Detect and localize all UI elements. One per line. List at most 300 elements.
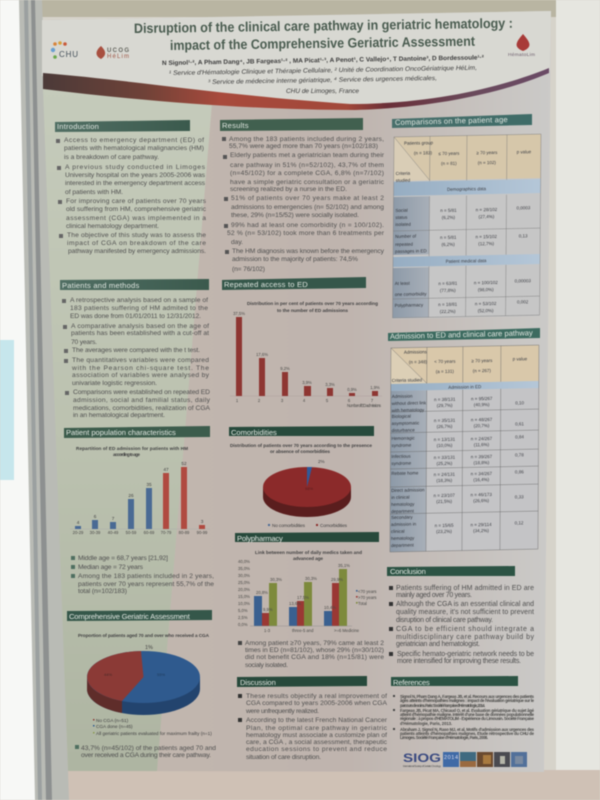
introduction text: is a breakdown of care pathway. [64, 154, 159, 161]
results text: Among the 183 patients included during 2 years, [229, 136, 384, 143]
introduction text: pathway manifested by emergency admissions. [68, 248, 206, 255]
introduction text: of patients with HM. [65, 189, 123, 196]
pie chart: comorbidities: No comorbidities [272, 523, 306, 528]
table: comparisons on patient age [393, 134, 541, 319]
heading: comparisons on the patient age [392, 114, 532, 128]
title: Disruption of the clinical care pathway in geriatric hematology : [134, 16, 513, 36]
bar chart: ED admission by age: according to age [113, 452, 140, 457]
results text: 51% of patients over 70 years make at least 2 [231, 195, 384, 202]
bar chart: ED admission by age: 80-89 [179, 530, 190, 535]
table: comparisons on patient age: p value [517, 149, 532, 155]
authors and affiliations [162, 54, 484, 95]
grouped bar chart: daily medics by age: 1-3 [264, 628, 271, 633]
heading: references: References [393, 678, 430, 687]
conclusion text: disruption of clinical care pathway. [396, 617, 493, 624]
table: admission to ED: n = 15/65 [435, 523, 454, 528]
logo: SIOG 2014: International Society of Geriatric Oncology [403, 764, 442, 768]
table: admission to ED: Direct admission [391, 487, 425, 493]
bar chart: ED admission by age [70, 446, 210, 535]
table: comparisons on patient age: status [395, 215, 408, 220]
table: admission to ED: (18,8%) [473, 460, 490, 465]
table: admission to ED: 0,61 [515, 421, 524, 427]
heading: conclusion: Conclusion [390, 567, 426, 576]
table: admission to ED: disturbance [392, 428, 415, 433]
table: comparisons on patient age: (n = 102) [478, 160, 496, 165]
grouped bar chart: daily medics by age [238, 550, 377, 633]
heading: comprehensive geriatric assessment: Comprehensive Geriatric Assessment [69, 612, 191, 621]
CGA text [75, 745, 216, 759]
logo: UCOG HeLim [96, 46, 129, 60]
table: admission to ED: Rebate home [391, 470, 419, 476]
bar chart: ED admission by age: 7 [112, 516, 115, 521]
table: admission to ED: (11,6%) [474, 442, 490, 447]
grouped bar chart: daily medics by age: 17,5% [297, 595, 309, 600]
pie chart: CGA proportion: All geriatric patients evaluated for maximum frailty (n=1) [96, 731, 212, 736]
population text: patients over 70 years represent 55,7% of the [78, 581, 214, 588]
table: comparisons on patient age: (6,2%) [442, 215, 455, 220]
table: comparisons on patient age: n = 100/102 [474, 280, 498, 285]
introduction text: A previous study conducted in Limoges [65, 164, 206, 171]
results text: (n=45/102) for a complete CGA, 6,8% (n=7/102) [230, 170, 384, 177]
panel: comorbidities [229, 426, 374, 528]
grouped bar chart: daily medics by age: 30,3% [305, 576, 317, 581]
table: comparisons on patient age: 0,002 [517, 299, 529, 305]
table: admission to ED: (29,7%) [437, 403, 453, 408]
logo: CHU Limoges [51, 41, 78, 59]
table: admission to ED: (16,4%) [473, 477, 490, 482]
table: admission to ED: (10,0%) [437, 443, 453, 448]
results text: day. [231, 239, 243, 246]
grouped bar chart: daily medics by age: 35,0% [238, 566, 250, 571]
grouped bar chart: daily medics by age: Total [358, 601, 367, 606]
table: comparisons on patient age: one comorbidity [395, 291, 427, 297]
heading: patient population characteristics: Patient population characteristics [66, 428, 176, 437]
bar chart: ED admission by age: 40-49 [108, 530, 119, 535]
table: admission to ED: with hematology [392, 407, 425, 413]
bar chart: ED admissions distribution: 1,9% [370, 385, 380, 390]
table: admission to ED: (34,2%) [473, 528, 489, 533]
pie chart: comorbidities: 98% [305, 486, 313, 491]
population text: total (n=102/183) [78, 588, 127, 595]
discussion text: Plan, the optimal care pathway in geriatric [246, 725, 388, 732]
bar chart: ED admission by age: 52 [181, 461, 187, 466]
population text: Among the 183 patients included in 2 years, [78, 573, 214, 580]
discussion text [238, 693, 388, 761]
table: admission to ED: 0,12 [515, 520, 524, 526]
results text: admissions to emergencies (n= 52/102) and among [231, 204, 384, 211]
grouped bar chart: daily medics by age: >=6 Medicine [334, 628, 360, 633]
grouped bar chart: daily medics by age: 13,6% [289, 601, 301, 606]
methods text: A retrospective analysis based on a sample of [70, 297, 208, 304]
heading: comorbidities [229, 426, 374, 437]
table: admission to ED: < 70 years [434, 359, 456, 364]
table: admission to ED: Secondary [391, 515, 413, 520]
bar chart: ED admission by age: 50-59 [126, 530, 137, 535]
conclusion text: Specific hemato-geriatric network needs to be [397, 651, 534, 658]
panel: conclusion [387, 566, 534, 665]
introduction text: University hospital on the years 2005-2006 was [65, 172, 206, 179]
panel: patients and methods [60, 279, 211, 419]
grouped bar chart: daily medics by age: 9,9% [263, 607, 273, 612]
table: admission to ED: n = 34/267 [471, 471, 493, 476]
table: admission to ED: n = 38/131 [434, 397, 456, 402]
table: admission to ED: (n = 348) [409, 359, 428, 365]
methods text: medications, comorbidities, realization of CGA [73, 405, 211, 412]
methods text: 70 years. [71, 339, 97, 346]
grouped bar chart: daily medics by age: advanced age [293, 556, 323, 561]
table: comparisons on patient age: passages in ED [395, 248, 427, 254]
table: admission to ED: n = 46/173 [471, 492, 492, 497]
authors and affiliations: ¹ Service d'Hématologie Clinique et Thérapie Cellulaire, ² Unité de Coordination OncoGériatrique HéLim, [169, 65, 477, 77]
results text: have a simple geriatric consultation or a geriatric [230, 179, 385, 186]
table: comparisons on patient age: 0,00003 [515, 278, 531, 284]
bar chart: ED admissions distribution: to the number of ED admissions [277, 308, 348, 313]
table: admission to ED: 0,10 [515, 400, 525, 406]
panel: comprehensive geriatric assessment [67, 610, 216, 759]
table: comparisons on patient age: (n = 81) [441, 161, 457, 166]
panel: polypharmacy [235, 532, 384, 669]
results text: these, 29% (n=15/52) were socially isolated. [231, 212, 359, 219]
polypharmacy text: times in ED (n=81/102), whose 29% (n=30/102) [245, 647, 384, 654]
table: comparisons on patient age: n = 63/81 [438, 281, 458, 286]
heading: polypharmacy [235, 532, 379, 543]
bar chart: ED admission by age: 3 [201, 519, 204, 524]
grouped bar chart: daily medics by age: 30,0% [238, 573, 250, 578]
table: admission to ED: (26,6%) [473, 498, 490, 503]
grouped bar chart: daily medics by age: 0,0% [238, 622, 248, 627]
table: admission to ED: 0,78 [515, 452, 524, 458]
references list: Limoges. Société Française d'Hématologie, Paris, 2008. [400, 735, 488, 740]
table: admission to ED: (18,3%) [436, 478, 453, 483]
table: comparisons on patient age: 0,13 [519, 233, 528, 238]
pie chart: CGA proportion: No CGA (n=51) [96, 718, 129, 723]
table: admission to ED: ≥ 70 years [471, 358, 493, 363]
table: comparisons on patient age: (27,4%) [478, 214, 495, 219]
bar chart: ED admissions distribution: Distribution in per cent of patients over 70 years according [247, 301, 378, 306]
table: comparisons on patient age: Patient medical data [446, 258, 487, 264]
panel: admission to ED and clinical care pathway [388, 328, 540, 552]
table: comparisons on patient age: n = 5/81 [440, 208, 457, 213]
table: admission to ED: without direct link [392, 400, 427, 406]
bar chart: ED admissions distribution: 37,5% [233, 311, 245, 316]
grouped bar chart: daily medics by age: 20,0% [238, 587, 250, 592]
grouped bar chart: daily medics by age: 2,5% [238, 615, 248, 620]
decorative swoosh banner [43, 68, 549, 110]
bar chart: ED admissions distribution [230, 301, 382, 408]
table: comparisons on patient age: n = 18/81 [438, 302, 458, 307]
introduction text: impact of CGA on breakdown of the care [67, 240, 206, 247]
heading: admission to ED and clinical care pathway: Admission to ED and clinical care pathway [390, 328, 533, 341]
logo: HematoLim [508, 34, 535, 58]
references list: parcours de soins. Paris: Société Française d'Hématologie, 2014. [400, 703, 485, 708]
bar chart: ED admission by age: 26 [128, 493, 134, 498]
table: comparisons on patient age: ≤ 70 years [438, 151, 460, 156]
CGA text: 43,7% (n=45/102) of the patients aged 70 and [81, 745, 216, 752]
grouped bar chart: daily medics by age: 20,8% [256, 590, 268, 595]
introduction text: clinical hematology department. [66, 223, 159, 230]
panel: discussion [237, 676, 388, 761]
methods text: Comparisons were established on repeated ED [73, 389, 210, 396]
authors and affiliations: ³ Service de médecine interne gériatrique, ⁴ Service des urgences médicales, [208, 75, 437, 86]
heading: patients and methods [60, 279, 209, 290]
methods text: A comparative analysis based on the age of [71, 323, 209, 330]
table: admission to ED: Admission in ED [448, 384, 482, 390]
logo: SIOG 2014 [403, 751, 527, 768]
table: admission to ED: (n = 267) [473, 368, 491, 373]
bar chart: ED admissions distribution: 17,6% [256, 352, 268, 357]
table: admission to ED: Biological [392, 414, 411, 419]
logo: HematoLim: HématoLim [508, 52, 535, 58]
bar chart: ED admissions distribution: 6 [348, 398, 351, 403]
table: admission to ED: (20,7%) [474, 423, 490, 428]
table: admission to ED: n = 33/131 [434, 455, 456, 460]
table: admission to ED: Infectious [391, 454, 411, 459]
panel: results [220, 118, 385, 273]
discussion text: care, a CGA , a social assessment, therapeutic [246, 739, 388, 746]
table: admission to ED: (25,2%) [436, 461, 453, 466]
grouped bar chart: daily medics by age: 30,3% [270, 577, 282, 582]
introduction text: The objective of this study was to assess the [67, 232, 206, 239]
references list: âgés atteints d'hémopathies malignes : impact de l'évaluation gériatrique sur le [400, 698, 535, 703]
population text: Middle age = 68,7 years [21,92] [78, 555, 168, 562]
bar chart: ED admissions distribution: 0,9% [347, 387, 357, 392]
introduction text: For improving care of patients over 70 years [66, 198, 207, 205]
heading: introduction: Introduction [57, 122, 99, 131]
polypharmacy text: socialy isolated. [245, 662, 288, 669]
methods text: admission, social and familial status, daily [73, 397, 211, 404]
table: admission to ED: p value [513, 356, 528, 362]
logo: UCOG HeLim: UCOG [107, 48, 129, 54]
heading: comprehensive geriatric assessment [67, 610, 212, 621]
table: admission to ED: department [391, 509, 415, 514]
table: admission to ED: Criteria studied [392, 377, 423, 383]
table: comparisons on patient age: (77,8%) [440, 288, 456, 293]
results text: Elderly patients met a geriatrician team during their [230, 152, 385, 159]
table: admission to ED: Admissions [404, 349, 428, 355]
bar chart: ED admissions distribution: 5 [326, 398, 329, 403]
table: comparisons on patient age: n = 28/102 [476, 207, 498, 212]
results text: The HM diagnosis was known before the emergency [232, 248, 385, 255]
population text [71, 555, 214, 595]
pie chart: CGA proportion: Proportion of patients aged 70 and over who received a CGA [78, 633, 210, 638]
table: admission to ED: clinical [391, 529, 405, 534]
table: comparisons on patient age: studied [396, 178, 411, 183]
grouped bar chart: daily medics by age: <70 years [358, 589, 377, 594]
bar chart: ED admissions distribution: Number of ED admissions [347, 403, 381, 408]
results text [222, 136, 385, 273]
table: admission to ED: (26,7%) [437, 424, 453, 429]
table: comparisons on patient age: (22,2%) [440, 309, 456, 314]
heading: polypharmacy: Polypharmacy [237, 534, 283, 543]
bar chart: ED admissions distribution: 3,3% [325, 382, 335, 387]
pie chart: CGA proportion: 1% [145, 645, 153, 651]
bar chart: ED admission by age: 6 [94, 514, 97, 519]
table: admission to ED: syndrome [391, 443, 412, 448]
table: admission to ED: n = 13/131 [434, 437, 456, 442]
results text: screening realized by a nurse in the ED. [230, 186, 347, 193]
pie chart: CGA proportion [78, 633, 212, 736]
conclusion text: Although the CGA is an essential clinical and [396, 601, 534, 608]
methods text [62, 297, 211, 419]
table: comparisons on patient age: repeated [395, 242, 413, 247]
table: comparisons on patient age: Number of [395, 234, 417, 239]
pie chart: comorbidities: Distribution of patients over 70 years according to the presence [230, 443, 372, 448]
grouped bar chart: daily medics by age: 10,4% [324, 605, 336, 610]
bar chart: ED admissions distribution: 4 [303, 398, 306, 403]
polypharmacy text: Among patient ≥70 years, 79% came at least 2 [245, 640, 384, 647]
references list: régionale : à propos d'HEMATOLIM - Expérience du Limousin. Société Française [400, 716, 535, 721]
bar chart: ED admissions distribution: 3 [281, 398, 284, 403]
discussion text: These results objectify a real improvement of [246, 693, 387, 700]
conclusion text: quality measure, it's not sufficient to prevent [396, 609, 534, 616]
table: admission to ED: Admission [392, 394, 413, 399]
introduction text: patients with hematological malignancies (HM) [64, 145, 204, 152]
table: admission to ED: (40,9%) [474, 402, 490, 407]
heading: comorbidities: Comorbidities [231, 428, 277, 437]
table: comparisons on patient age: (6,2%) [441, 242, 455, 247]
grouped bar chart: daily medics by age: three-5 and [292, 628, 314, 633]
conclusion text: Patients suffering of HM admitted in ED are [396, 585, 534, 592]
methods text: univariate logistic regression. [72, 380, 157, 387]
methods text: 183 patients suffering of HM admited to the [70, 305, 208, 312]
bar chart: ED admission by age: 90-99 [197, 530, 208, 535]
table: comparisons on patient age: Criteria [396, 171, 411, 176]
heading: references [391, 676, 518, 687]
results text: 99% had at least one comorbidity (n = 100/102). [231, 222, 384, 229]
bar chart: ED admission by age: 20-29 [73, 530, 84, 535]
table: comparisons on patient age: Demographics data [447, 186, 487, 192]
panel: repeated access to ED [222, 277, 382, 408]
references list: d'Hématologie, Paris, 2013. [400, 721, 452, 726]
pie chart: comorbidities: 2% [318, 459, 325, 464]
bar chart: ED admission by age: 70-79 [161, 530, 172, 535]
references list: Signol N, Pham Dang A, Fargeas JB, et al. Recours aux urgences des patients [400, 694, 535, 699]
discussion text: hematology must associate a customize plan of [246, 732, 387, 739]
table: admission to ED: n = 35/131 [434, 418, 456, 423]
table: admission to ED: department [391, 543, 414, 548]
table: comparisons on patient age: 0,0003 [517, 205, 531, 211]
heading: conclusion [387, 566, 515, 576]
panel: comparisons on the patient age [392, 114, 541, 319]
results text: 55,7% were aged more than 70 years (n=102/183) [229, 143, 378, 150]
table: admission to ED: admission in [391, 521, 417, 527]
introduction text: Access to emergency department (ED) of [64, 137, 204, 144]
introduction text: assessment (CGA) was implemented in a [66, 215, 206, 222]
grouped bar chart: daily medics by age: 25,0% [238, 580, 250, 585]
table: admission to ED: n = 24/131 [434, 472, 456, 477]
discussion text: CGA compared to years 2005-2006 when CGA [246, 700, 388, 707]
table: admission to ED: (21,5%) [436, 499, 453, 504]
table: admission to ED: asymptomatic [392, 420, 420, 426]
logo: SIOG 2014: SIOG [403, 751, 441, 765]
references list [393, 694, 535, 740]
pie chart: comorbidities [230, 443, 372, 528]
methods text: with the Pearson chi-square test. The [71, 365, 209, 372]
heading: repeated access to ED [222, 277, 366, 290]
bar chart: ED admission by age: 4 [77, 520, 80, 525]
logo: UCOG HeLim: HéLim [107, 54, 129, 60]
introduction text: old suffering from HM, comprehensive geriatric [66, 206, 207, 213]
table: admission to ED: n = 23/107 [434, 493, 455, 498]
methods text: in an hematological department. [73, 412, 165, 419]
table: admission to ED: n = 95/267 [471, 396, 493, 401]
table: comparisons on patient age: (52,0%) [478, 308, 494, 313]
bar chart: ED admissions distribution: 1 [236, 398, 239, 403]
methods text: The quantitatives variables were compared [72, 357, 209, 364]
bar chart: ED admission by age: 30-39 [90, 530, 101, 535]
references list: atteint d'hémopathie maligne. Intérêt d'une base de données populationnelle [400, 712, 535, 717]
table: comparisons on patient age: Social [395, 208, 408, 213]
conclusion text: CGA to be efficient should integrate a [396, 626, 534, 633]
methods text: The averages were compared with the t test. [72, 347, 200, 354]
heading: patient population characteristics [64, 426, 210, 438]
discussion text: education sessions to prevent and reduce [246, 746, 387, 753]
logo: SIOG 2014: 2014 [444, 755, 458, 761]
heading: results [220, 118, 363, 131]
discussion text: According to the latest French National Cancer [246, 717, 388, 724]
table: admission to ED: n = 39/267 [471, 454, 493, 459]
grouped bar chart: daily medics by age: 29,9% [331, 577, 343, 582]
bar chart: ED admissions distribution: 9,2% [280, 366, 290, 371]
results text: (n= 76/102) [232, 266, 265, 273]
table: comparisons on patient age: n = 15/102 [475, 234, 497, 239]
grouped bar chart: daily medics by age: Link between number of daily medics taken and [255, 550, 362, 555]
table: admission to ED: syndrome [391, 461, 412, 466]
population text: Median age = 72 years [78, 564, 144, 571]
heading: discussion [237, 676, 367, 687]
grouped bar chart: daily medics by age: 35,1% [338, 563, 350, 568]
results text: care pathway in 51% (n=52/102), 43,7% of them [230, 162, 384, 169]
table: admission to ED: 0,84 [515, 434, 524, 440]
table: admission to ED [390, 345, 539, 552]
table: comparisons on patient age: Patients group [404, 140, 433, 146]
table: comparisons on patient age: (98,0%) [478, 287, 494, 292]
grouped bar chart: daily medics by age: >70 years [358, 595, 377, 600]
references list: Fargeas JB, Picat MA, Chicaud O, et al. Evaluation gériatrique du sujet âgé [400, 708, 535, 713]
heading: repeated access to ED: Repeated access to ED [224, 280, 308, 289]
methods text: ED was done from 01/01/2011 to 12/31/2012. [70, 313, 201, 320]
table: admission to ED: n = 29/114 [471, 522, 492, 527]
grouped bar chart: daily medics by age: 5,0% [238, 608, 248, 613]
table: comparisons on patient age: (n = 183) [414, 150, 433, 156]
results text: admission to the majority of patients: 74,5% [232, 256, 358, 263]
title [134, 16, 513, 53]
table: comparisons on patient age: isolated [395, 222, 411, 227]
conclusion text: multidisciplinary care pathway build by [396, 634, 534, 641]
table: admission to ED: 0,86 [515, 469, 524, 475]
table: comparisons on patient age: n = 53/102 [475, 301, 497, 306]
discussion text: were unfrequently realized. [245, 708, 319, 715]
methods text: patients has been established with a cut-off at [71, 330, 209, 337]
table: comparisons on patient age: n = 5/81 [440, 235, 457, 240]
pie chart: CGA proportion: 55% [157, 672, 165, 677]
heading: comparisons on the patient age: Comparisons on the patient age [395, 115, 508, 127]
bar chart: ED admissions distribution: 3,9% [302, 380, 312, 385]
table: comparisons on patient age: Polypharmacy [395, 302, 424, 308]
table: admission to ED: hematology [391, 536, 415, 541]
heading: results: Results [222, 121, 249, 130]
table: comparisons on patient age: (12,7%) [478, 241, 495, 246]
CGA text: over received a CGA during their care pathway. [81, 752, 211, 759]
table: admission to ED: in clinical [391, 495, 409, 500]
polypharmacy text: did not benefit CGA and 18% (n=15/81) were [245, 654, 384, 661]
conclusion text [389, 585, 534, 665]
conclusion text: geriatrician and hematologist. [396, 641, 480, 648]
bar chart: ED admissions distribution: 7 [371, 398, 374, 403]
panel: patient population characteristics [64, 426, 214, 595]
pie chart: CGA proportion: CGA done (n=45) [96, 724, 133, 729]
table: admission to ED: hematology [391, 502, 415, 507]
